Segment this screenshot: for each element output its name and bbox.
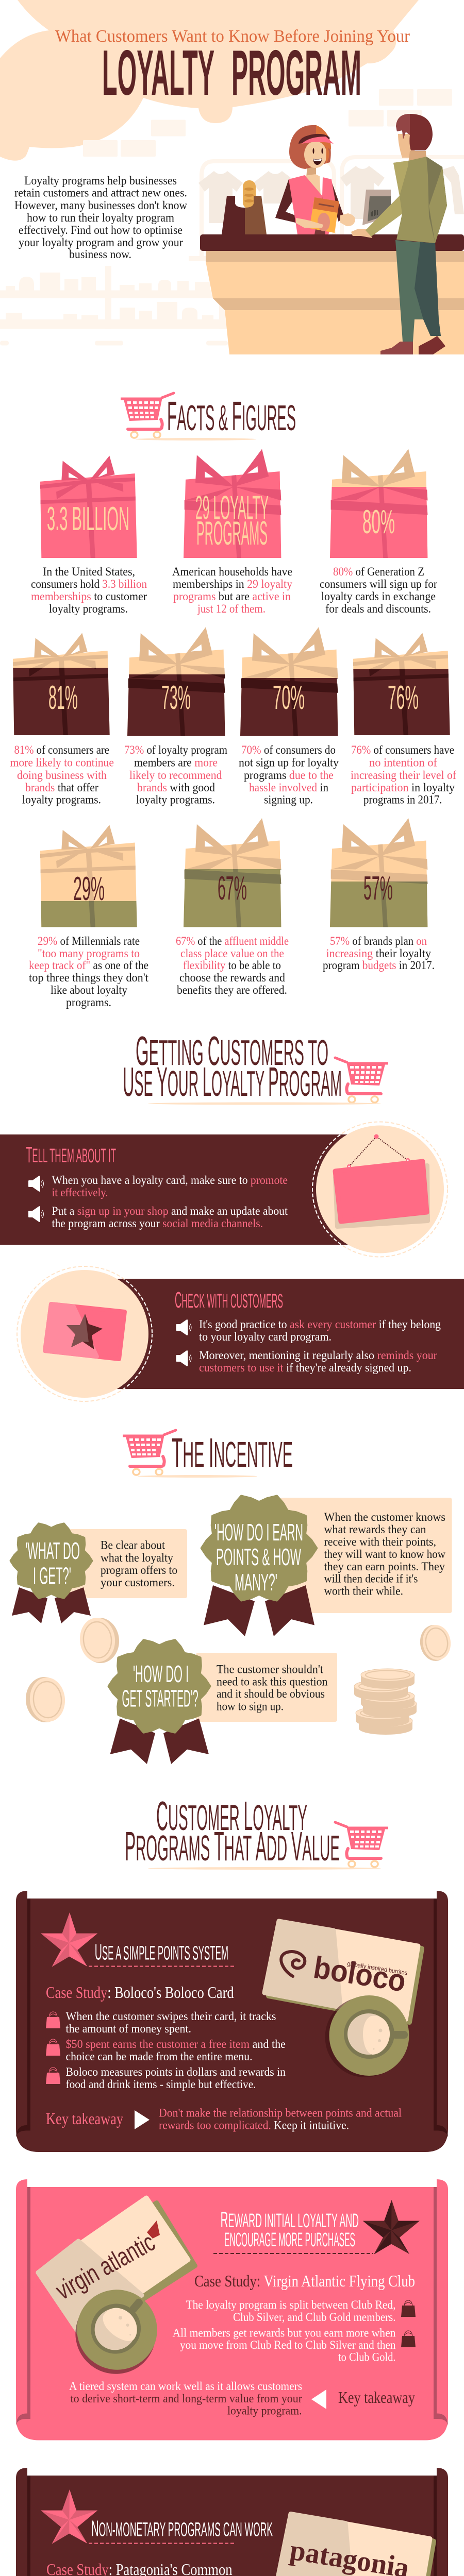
panel: reward initial loyalty: Case Study: Virgin Atlantic Flying Club	[194, 2272, 415, 2290]
stat caption: 29%: like about loyalty	[51, 984, 127, 997]
card: how do I earn points	[202, 1496, 452, 1636]
gift: 67%	[184, 818, 281, 927]
tip: ask every customer: It's good practice to ask every customer if they belong	[199, 1318, 441, 1331]
tip: sign up in shop: Put a sign up in your shop and make an update about	[52, 1205, 288, 1218]
stat caption: 80%: for deals and discounts.	[325, 602, 431, 616]
stat caption: 70%: signing up.	[264, 793, 313, 807]
tip: sign up in shop	[52, 1205, 288, 1230]
boloco card and coffee cup: boloco	[311, 1950, 408, 1998]
card: what do I get	[11, 1523, 187, 1623]
key takeaway	[69, 2380, 415, 2418]
stat caption: 29%: top three things they don't	[29, 971, 148, 985]
icon: star	[41, 1912, 97, 1967]
stat caption: 73%	[124, 743, 227, 807]
key takeaway: loyalty program.	[227, 2404, 302, 2418]
panel: tell them about it: TELL THEM ABOUT IT	[26, 1142, 116, 1167]
stat caption: 29%: "too many programs to	[38, 947, 140, 960]
gift: 29 loyalty programs	[184, 449, 281, 558]
text: 29 LOYALTY	[195, 488, 269, 527]
card: how do I get started: and it should be obvious	[217, 1687, 325, 1701]
tip: promote it: it effectively.	[52, 1186, 108, 1199]
intro text: how to run their loyalty program	[27, 211, 174, 225]
bullet: dollars and rewards: food and drink items - simple but effective.	[66, 2078, 256, 2091]
key takeaway: Don't make the relationship between points and actual	[159, 2106, 402, 2120]
heading: customer loyalty programs that add value	[125, 1793, 388, 1870]
stat caption: 70%: programs due to the	[244, 769, 334, 782]
stat caption: 67%	[176, 935, 289, 997]
stat caption: 81%: brands that offer	[25, 781, 98, 794]
gift: 57%: 57%	[363, 869, 393, 907]
shop counter	[200, 234, 464, 354]
tip: remind customers: Moreover, mentioning it regularly also reminds your	[199, 1349, 437, 1362]
stat caption: 67%: benefits they are offered.	[177, 984, 287, 997]
icon: speaker	[28, 1176, 43, 1192]
gift: 29%: 29%	[73, 870, 105, 907]
card: how do I get started: GET STARTED'?	[122, 1685, 198, 1712]
stat caption: 29%: programs.	[66, 996, 111, 1009]
bullet: club tiers	[186, 2298, 396, 2324]
intro text: effectively. Find out how to optimise	[19, 224, 183, 237]
intro text: Loyalty programs help businesses	[24, 174, 177, 188]
heading: facts and figures: FACTS & FIGURES	[167, 393, 296, 439]
bread in shopping bag	[222, 180, 267, 234]
gift: 70%	[240, 627, 338, 736]
stat caption: 73%: loyalty programs.	[136, 793, 215, 807]
stat caption: 81%: doing business with	[17, 769, 107, 782]
bullet: dollars and rewards	[66, 2065, 286, 2091]
stat caption: 80%: consumers will sign up for	[320, 578, 437, 591]
card: how do I earn points: POINTS & HOW	[216, 1544, 301, 1570]
stat caption: 70%: not sign up for loyalty	[239, 756, 339, 770]
key takeaway: A tiered system can work well as it allows customers	[69, 2380, 302, 2393]
hero clothing racks with shirts	[198, 157, 464, 258]
stat caption: 81%: loyalty programs.	[22, 793, 101, 807]
tip: promote it	[52, 1174, 288, 1199]
stat caption: 73%: 73% of loyalty program	[124, 743, 227, 757]
card: how do I get started: need to ask this question	[217, 1675, 328, 1689]
stat caption: 29%	[29, 935, 148, 1009]
icon: loyalty card with star	[45, 1304, 125, 1359]
bullet: earn more: to Club Gold.	[338, 2351, 396, 2364]
stat caption: 57%	[323, 935, 435, 972]
key takeaway: rewards too complicated. Keep it intuitive.	[159, 2119, 349, 2132]
stat caption: 76%: 76% of consumers have	[351, 743, 454, 757]
stat caption: 29 programs: programs but are active in	[173, 590, 291, 603]
icon: bag	[46, 2012, 60, 2028]
stat caption: 57%: increasing their loyalty	[326, 947, 431, 960]
gift: 73%: 73%	[161, 679, 191, 716]
bullet: card tracks spend	[66, 2010, 276, 2036]
stat caption: 67%: flexibility to be able to	[183, 959, 281, 972]
card: how do I earn points: they will want to know how	[324, 1548, 445, 1561]
title: LOYALTY	[102, 38, 214, 109]
gift: 29%	[40, 825, 137, 927]
gift: 76%: 76%	[388, 679, 419, 716]
boloco card and coffee cup	[264, 1921, 422, 2077]
stat caption: 57%: program budgets in 2017.	[323, 959, 435, 972]
panel: use a simple points system	[16, 1891, 448, 2152]
key takeaway: Key takeaway	[46, 2109, 123, 2128]
bullet: earn more: All members get rewards but you earn more when	[173, 2327, 396, 2340]
shop assistant	[275, 125, 355, 234]
gift: 80%	[330, 449, 427, 558]
stat caption: 29 programs	[172, 565, 292, 616]
intro text: your loyalty program and grow your	[19, 236, 183, 249]
tip: remind customers	[199, 1349, 437, 1375]
stat caption: 29 programs: memberships in 29 loyalty	[173, 578, 292, 591]
panel: check with customers	[17, 1266, 464, 1401]
stat caption: 73%: likely to recommend	[129, 769, 222, 782]
card: how do I earn points: what rewards they can	[324, 1523, 426, 1536]
stat caption: 73%: brands with good	[137, 781, 215, 794]
card: what do I get: program offers to	[101, 1564, 177, 1577]
icon: bag	[46, 2067, 60, 2084]
gift: 76%	[353, 633, 450, 735]
stat caption: 67%: choose the rewards and	[179, 971, 285, 985]
stat caption: 29%: keep track of" as one of the	[29, 959, 148, 972]
panel: tell them about it	[0, 1122, 448, 1257]
key takeaway: Key takeaway	[338, 2388, 415, 2406]
panel: use a simple points system: USE A SIMPLE POINTS SYSTEM	[95, 1939, 228, 1965]
stat caption: 76%: increasing their level of	[351, 769, 456, 782]
card: how do I earn points: MANY?'	[235, 1569, 277, 1596]
stat caption: 3.3 billion: loyalty programs.	[49, 602, 128, 616]
stat caption: 81%: 81% of consumers are	[14, 743, 109, 757]
stat caption: 76%: no intention of	[369, 756, 437, 770]
icon: star	[41, 2489, 97, 2544]
bullet: card tracks spend: When the customer swipes their card, it tracks	[66, 2010, 276, 2023]
heading: facts and figures	[121, 393, 296, 440]
virgin atlantic card and coffee cup: virgin atlantic	[51, 2228, 160, 2305]
stat caption: 80%: 80% of Generation Z	[333, 565, 424, 579]
icon: star	[363, 2200, 420, 2255]
stat caption: 70%	[239, 743, 339, 807]
card: how do I get started	[109, 1640, 337, 1764]
stat caption: 70%: hassle involved in	[249, 781, 328, 794]
gift: 80%: 80%	[362, 503, 395, 540]
key takeaway: to derive short-term and long-term value from your	[71, 2392, 302, 2405]
card: how do I earn points: they can earn points. They	[324, 1560, 445, 1573]
virgin atlantic card and coffee cup	[38, 2198, 195, 2391]
card: how do I get started: 'HOW DO I	[133, 1660, 189, 1687]
stat caption: 3.3 billion	[31, 565, 147, 616]
bullet: earn more	[173, 2327, 396, 2364]
tip: promote it: When you have a loyalty card, make sure to promote	[52, 1174, 288, 1187]
text: PROGRAMS	[196, 514, 268, 552]
intro text: retain customers and attract new ones.	[14, 187, 187, 200]
card: what do I get: what the loyalty	[101, 1551, 173, 1565]
panel: use a simple points system: Case Study: Boloco's Boloco Card	[46, 1983, 234, 2002]
male customer	[351, 114, 447, 354]
heading: the incentive: THE INCENTIVE	[172, 1430, 293, 1476]
title: What Customers Want to Know Before Joining Your	[55, 27, 410, 46]
stat caption: 80%	[320, 565, 437, 616]
stat caption: 81%	[10, 743, 114, 807]
stat caption: 57%: 57% of brands plan on	[330, 935, 427, 948]
intro text: business now.	[69, 248, 131, 261]
card: how do I earn points: When the customer knows	[324, 1511, 445, 1524]
gift: 81%	[13, 633, 110, 735]
icon: speaker	[176, 1319, 191, 1335]
hero background blob	[0, 0, 419, 161]
bullet: earn more: you move from Club Red to Club Silver and then	[180, 2338, 396, 2352]
hero faded background decoration	[0, 89, 452, 345]
stat caption: 29 programs: just 12 of them.	[197, 602, 266, 616]
stat caption: 67%: 67% of the affluent middle	[176, 935, 289, 948]
tip: ask every customer	[199, 1318, 441, 1344]
gift: 81%: 81%	[48, 679, 78, 716]
stat caption: 70%: 70% of consumers do	[241, 743, 336, 757]
panel: reward initial loyalty	[16, 2179, 448, 2440]
card: how do I get started: The customer shouldn't	[217, 1663, 323, 1676]
tip: ask every customer: to your loyalty card program.	[199, 1330, 332, 1344]
stat caption: 76%	[351, 743, 456, 807]
heading: the incentive	[123, 1430, 293, 1478]
card: what do I get: 'WHAT DO	[25, 1537, 80, 1564]
tip: sign up in shop: the program across your social media channels.	[52, 1217, 263, 1230]
stat caption: 29 programs: American households have	[172, 565, 292, 579]
panel: check with customers: CHECK WITH CUSTOMERS	[175, 1287, 283, 1313]
bullet: card tracks spend: the amount of money spent.	[66, 2022, 191, 2036]
cash register	[362, 190, 391, 225]
card: how do I earn points: receive with their points,	[324, 1535, 436, 1549]
card: how do I earn points: 'HOW DO I EARN	[214, 1519, 303, 1546]
stat caption: 3.3 billion: In the United States,	[43, 565, 135, 579]
tip: remind customers: customers to use it if they're already signed up.	[199, 1361, 411, 1375]
icon: coins	[24, 1616, 453, 1735]
heading: customer loyalty programs that add value: PROGRAMS THAT ADD VALUE	[125, 1823, 340, 1869]
bullet: dollars and rewards: Boloco measures points in dollars and rewards in	[66, 2065, 286, 2079]
bullet: club tiers: The loyalty program is split between Club Red,	[186, 2298, 396, 2312]
heading: getting customers to use your loyalty program	[123, 1028, 388, 1105]
icon: bag	[46, 2039, 60, 2056]
text: 3.3 BILLION	[47, 500, 129, 537]
panel: non-monetary programs	[16, 2468, 448, 2576]
icon: speaker	[176, 1350, 191, 1366]
stat caption: 73%: members are more	[134, 756, 218, 770]
stat caption: 3.3 billion: memberships to customer	[31, 590, 147, 603]
stat caption: 80%: loyalty cards in exchange	[321, 590, 436, 603]
boloco card and coffee cup: globally inspired burritos	[347, 1960, 408, 1976]
icon: bag	[401, 2300, 416, 2317]
heading: getting customers to use your loyalty program: USE YOUR LOYALTY PROGRAM	[123, 1059, 342, 1105]
stat caption: 76%: programs in 2017.	[363, 793, 442, 807]
card: what do I get: I GET?'	[33, 1562, 71, 1589]
icon: speaker	[28, 1206, 43, 1222]
icon: hanging sign	[335, 1134, 428, 1227]
heading: customer loyalty programs that add value: CUSTOMER LOYALTY	[156, 1793, 307, 1839]
card: how do I earn points: worth their while.	[324, 1585, 403, 1598]
card: what do I get: Be clear about	[101, 1538, 165, 1552]
key takeaway	[46, 2106, 402, 2132]
bullet: club tiers: Club Silver, and Club Gold members.	[233, 2311, 396, 2324]
patagonia card and coffee cup	[276, 2514, 434, 2576]
stat caption: 29%: 29% of Millennials rate	[38, 935, 140, 948]
intro text	[14, 174, 187, 261]
intro text: However, many businesses don't know	[14, 199, 187, 212]
card: what do I get: your customers.	[101, 1576, 175, 1589]
card: how do I get started: how to sign up.	[217, 1700, 284, 1714]
stat caption: 67%: class place value on the	[180, 947, 284, 960]
bullet: free item	[66, 2038, 286, 2063]
bullet: free item: choice can be made from the entire menu.	[66, 2050, 253, 2063]
gift: 73%	[127, 627, 225, 736]
card: how do I earn points: will then decide if it's	[324, 1572, 418, 1586]
gift: 57%	[330, 818, 427, 927]
gift: 3.3 billion	[40, 455, 137, 558]
bullet: free item: $50 spent earns the customer a free item and the	[66, 2038, 286, 2051]
icon: bag	[401, 2331, 416, 2347]
gift: 70%: 70%	[273, 679, 305, 716]
stat caption: 81%: more likely to continue	[10, 756, 114, 770]
stat caption: 76%: participation in loyalty	[351, 781, 455, 794]
gift: 67%: 67%	[218, 869, 247, 907]
stat caption: 3.3 billion: consumers hold 3.3 billion	[31, 578, 147, 591]
